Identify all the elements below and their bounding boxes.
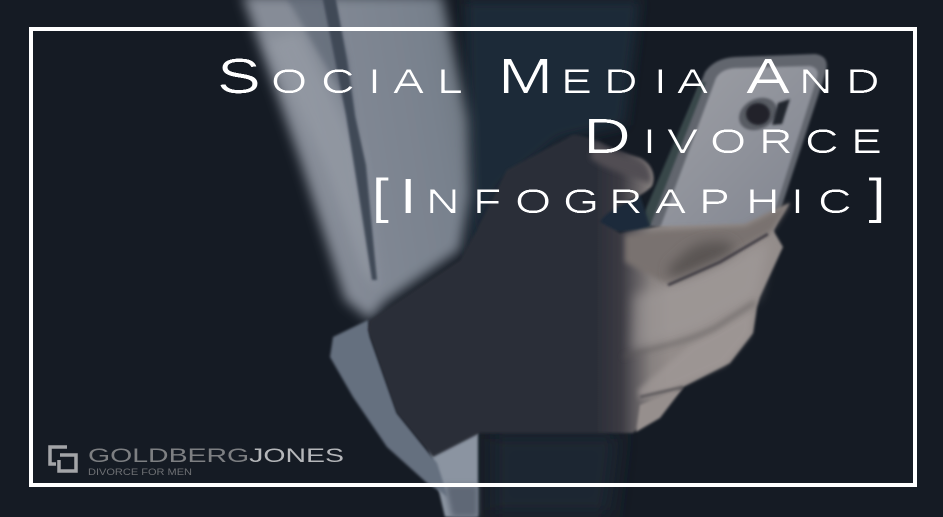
phone bbox=[583, 54, 827, 236]
title bbox=[217, 49, 886, 224]
icon: interlocked squares bbox=[50, 447, 76, 471]
wordmark: GOLDBERG JONES bbox=[88, 446, 344, 467]
tagline: DIVORCE FOR MEN bbox=[88, 467, 192, 477]
hand bbox=[368, 135, 790, 457]
white shirt bbox=[242, 0, 478, 517]
thumb bbox=[625, 203, 790, 285]
title line 1: Social Media And bbox=[217, 49, 880, 104]
title line 2: Divorce bbox=[583, 109, 882, 164]
fingers bbox=[632, 240, 770, 352]
shirt cuff bbox=[330, 320, 448, 497]
title line 3: [Infographic] bbox=[371, 169, 886, 224]
logo: Goldberg Jones bbox=[50, 446, 344, 477]
finger creases bbox=[668, 234, 768, 285]
